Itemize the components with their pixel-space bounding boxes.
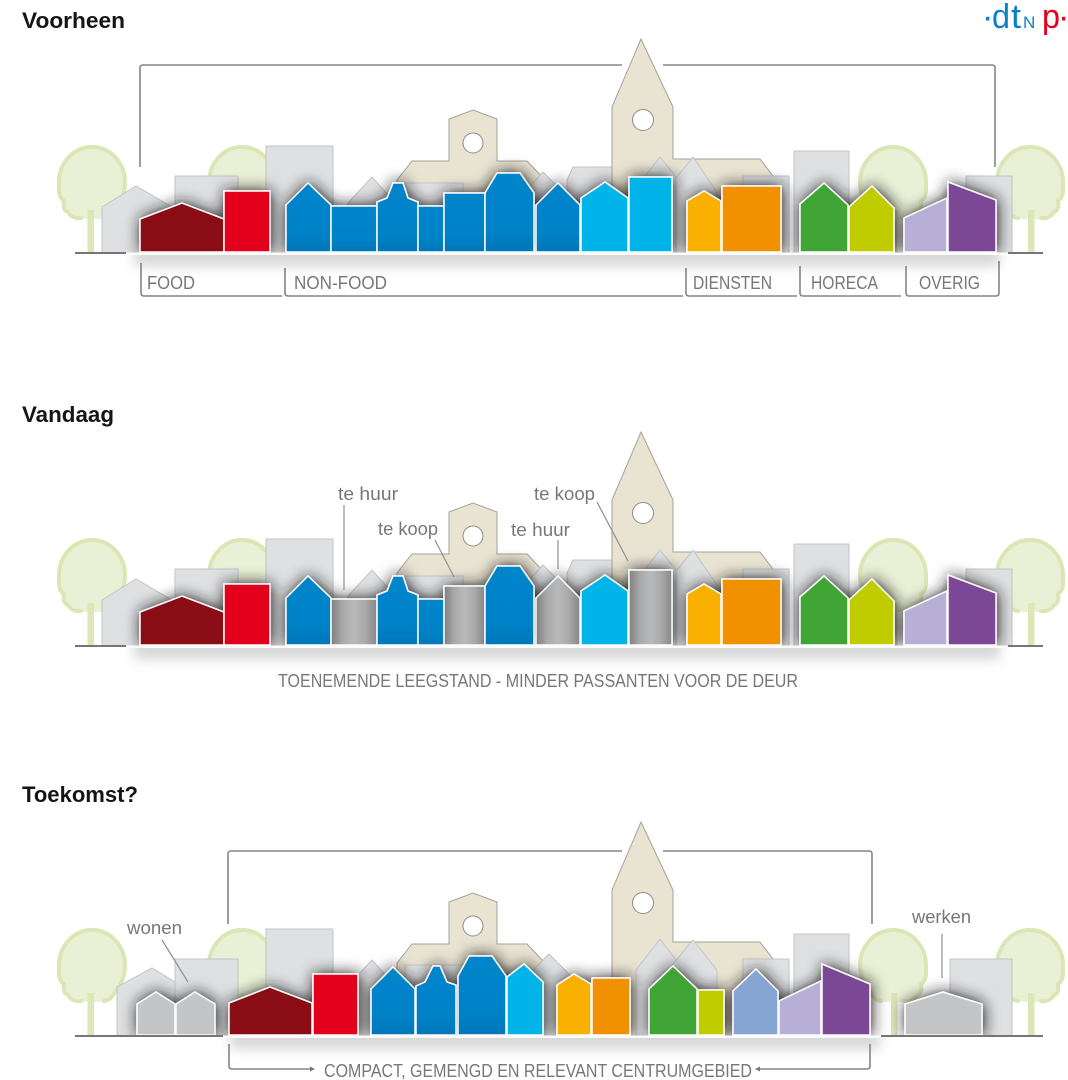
vacancy labels: te huur (511, 520, 570, 540)
bottom bracket right with arrow (755, 1044, 870, 1072)
caption: Vandaag: TOENEMENDE LEEGSTAND - MINDER PASSANTEN VOOR DE DEUR (278, 671, 798, 691)
diensten (687, 191, 721, 252)
logo: dtnp: N (1023, 13, 1035, 32)
label: wonen: wonen (126, 918, 182, 938)
label: wonen (126, 918, 188, 982)
category labels: FOOD (147, 273, 195, 293)
background buildings (117, 929, 1012, 1036)
category labels: HORECA (811, 273, 878, 293)
ground lines (75, 1035, 1043, 1037)
shop buildings with vacant units (140, 566, 996, 645)
horeca (800, 183, 848, 252)
trees (59, 930, 1063, 1036)
overig (904, 198, 947, 252)
background building behind church (567, 167, 615, 253)
category labels: OVERIG (919, 273, 980, 293)
scene: Vandaag skyline (59, 432, 1063, 676)
street shadow band (126, 252, 1008, 271)
top bracket (140, 65, 995, 167)
shop buildings (140, 173, 996, 252)
category labels (147, 273, 980, 293)
scene: Toekomst skyline (59, 822, 1063, 1080)
bottom bracket left with arrow (229, 1044, 315, 1072)
non-food (286, 183, 331, 252)
title: Voorheen: Voorheen (22, 8, 125, 33)
category labels: NON-FOOD (294, 273, 387, 293)
vacancy labels (338, 484, 595, 540)
background buildings (102, 146, 1012, 253)
category labels: DIENSTEN (693, 273, 772, 293)
background building behind church (567, 560, 615, 646)
church (397, 432, 773, 646)
ground lines (75, 252, 1043, 254)
church (397, 39, 773, 253)
title: Vandaag: Vandaag (22, 402, 114, 427)
food (140, 203, 224, 252)
trees (59, 147, 1063, 253)
housing and work units (137, 992, 982, 1035)
central shop buildings (229, 956, 870, 1035)
label: werken (911, 907, 971, 978)
top bracket (228, 851, 872, 924)
scene: Voorheen skyline (59, 39, 1063, 312)
street shadow band (223, 1029, 881, 1049)
church (397, 822, 773, 1036)
category brackets (141, 261, 999, 296)
vacancy labels: te huur (338, 484, 398, 504)
vacancy labels: te koop (378, 519, 438, 539)
label: werken: werken (911, 907, 971, 927)
title: Toekomst?: Toekomst? (22, 782, 138, 807)
ground cover below shadows (100, 1036, 1030, 1080)
leader lines for vacancy labels (344, 502, 628, 590)
background buildings (102, 539, 1012, 646)
trees (59, 540, 1063, 646)
vacancy labels: te koop (534, 484, 595, 504)
street shadow band (126, 646, 1008, 664)
ground lines (75, 645, 1043, 647)
